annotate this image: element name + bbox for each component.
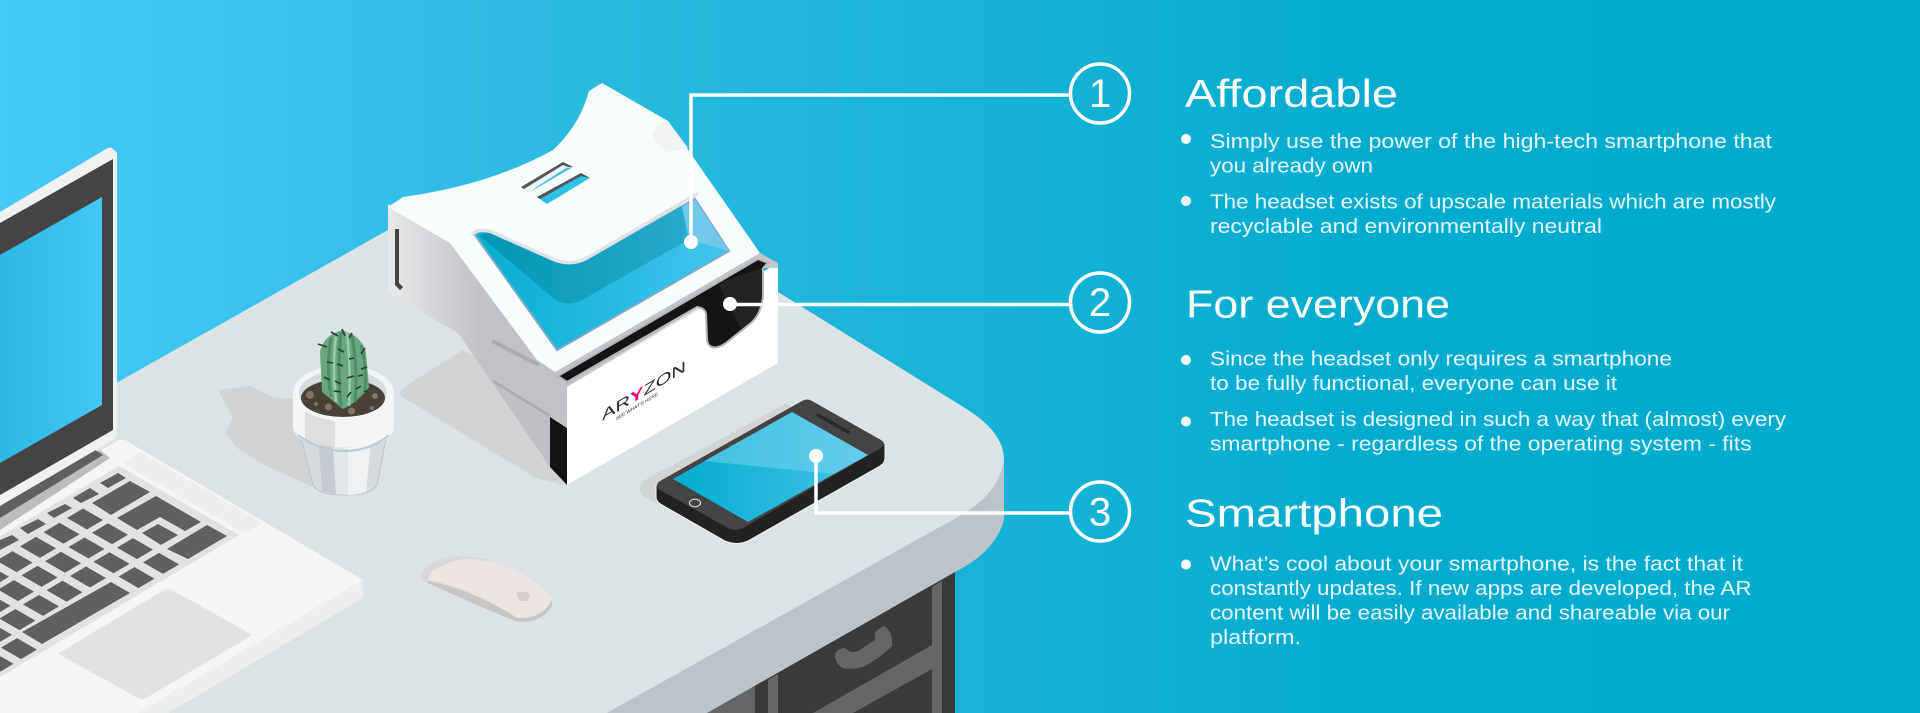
bullet list: For everyone: to be fully functional, everyone can use it	[1210, 373, 1617, 395]
bullet list: Smartphone: content will be easily available and shareable via our	[1210, 602, 1730, 624]
number badge 3: 3	[1089, 490, 1111, 534]
phone body	[657, 400, 884, 530]
phone slot	[558, 259, 768, 382]
cactus spines	[318, 329, 368, 397]
headset side slot	[395, 229, 403, 290]
number badge 1: 1	[1089, 72, 1111, 116]
bullet list: Smartphone: platform.	[1210, 627, 1301, 649]
laptop hinge	[0, 450, 110, 530]
heading: For everyone: For everyone	[1186, 284, 1450, 326]
bullet list: Affordable	[1181, 131, 1776, 238]
bullet list: Smartphone: constantly updates. If new apps are developed, the AR	[1210, 578, 1752, 600]
callout line 2	[723, 297, 1069, 311]
smartphone	[640, 400, 885, 544]
illustration: desk scene	[0, 83, 1004, 713]
headset lens window	[475, 199, 729, 350]
headset side panel	[388, 204, 567, 467]
laptop screen frame	[0, 148, 117, 506]
bullet list: Affordable: Simply use the power of the high-tech smartphone that	[1210, 131, 1773, 153]
number badge 2: 2	[1089, 281, 1111, 325]
callout line 3	[809, 449, 1069, 513]
number badge 2	[1070, 273, 1130, 332]
bullet list: Affordable: recyclable and environmentally neutral	[1210, 216, 1602, 238]
heading: Smartphone: Smartphone	[1185, 492, 1443, 536]
phone shadow	[640, 403, 800, 505]
Aryzon logo: AR YZON	[602, 358, 686, 425]
trackpad	[59, 589, 250, 699]
mouse	[421, 556, 552, 622]
laptop screen	[0, 197, 102, 463]
section: Affordable	[1181, 73, 1776, 238]
desk top	[0, 200, 1004, 713]
number badge 3	[1070, 482, 1130, 541]
pot upper	[293, 393, 394, 451]
phone side	[656, 443, 885, 544]
soil pebbles	[306, 391, 378, 414]
pot lower	[300, 433, 387, 495]
cactus body	[320, 330, 369, 409]
phone speaker	[818, 415, 848, 432]
bullet list: For everyone: smartphone - regardless of the operating system - fits	[1210, 434, 1752, 456]
headset shell	[388, 83, 760, 372]
headset top edge	[555, 253, 778, 387]
headset shadow on desk	[400, 350, 567, 486]
Aryzon logo: SEE WHAT'S HERE	[616, 392, 658, 422]
headset	[388, 83, 778, 485]
bullet list: Smartphone	[1181, 554, 1752, 649]
heading: Affordable: Affordable	[1185, 73, 1398, 116]
bullet list: Affordable: The headset exists of upscale materials which are mostly	[1210, 192, 1776, 214]
soil	[301, 379, 385, 417]
phone home button	[690, 499, 700, 507]
section: Smartphone	[1181, 492, 1752, 649]
cactus shadow	[218, 386, 320, 490]
headset box front	[567, 263, 778, 485]
keyboard keys	[0, 473, 227, 673]
bullet list: For everyone: Since the headset only requires a smartphone	[1210, 348, 1672, 370]
desk drawers	[700, 565, 955, 713]
section: For everyone	[1181, 284, 1786, 456]
phone screen	[673, 412, 868, 522]
laptop	[0, 148, 363, 713]
bullet list: For everyone	[1181, 348, 1786, 456]
bullet list: Smartphone: What’s cool about your smartphone, is the fact that it	[1210, 554, 1743, 576]
headset lower black side	[550, 417, 567, 485]
laptop base	[138, 580, 363, 713]
cactus ribs	[328, 332, 366, 406]
number badge 1	[1070, 64, 1130, 123]
bullet list: For everyone: The headset is designed in such a way that (almost) every	[1210, 409, 1786, 431]
headset strap slots	[521, 162, 590, 204]
bullet list: Affordable: you already own	[1210, 156, 1373, 178]
callout line 1	[684, 95, 1069, 249]
cactus in pot	[218, 329, 394, 495]
